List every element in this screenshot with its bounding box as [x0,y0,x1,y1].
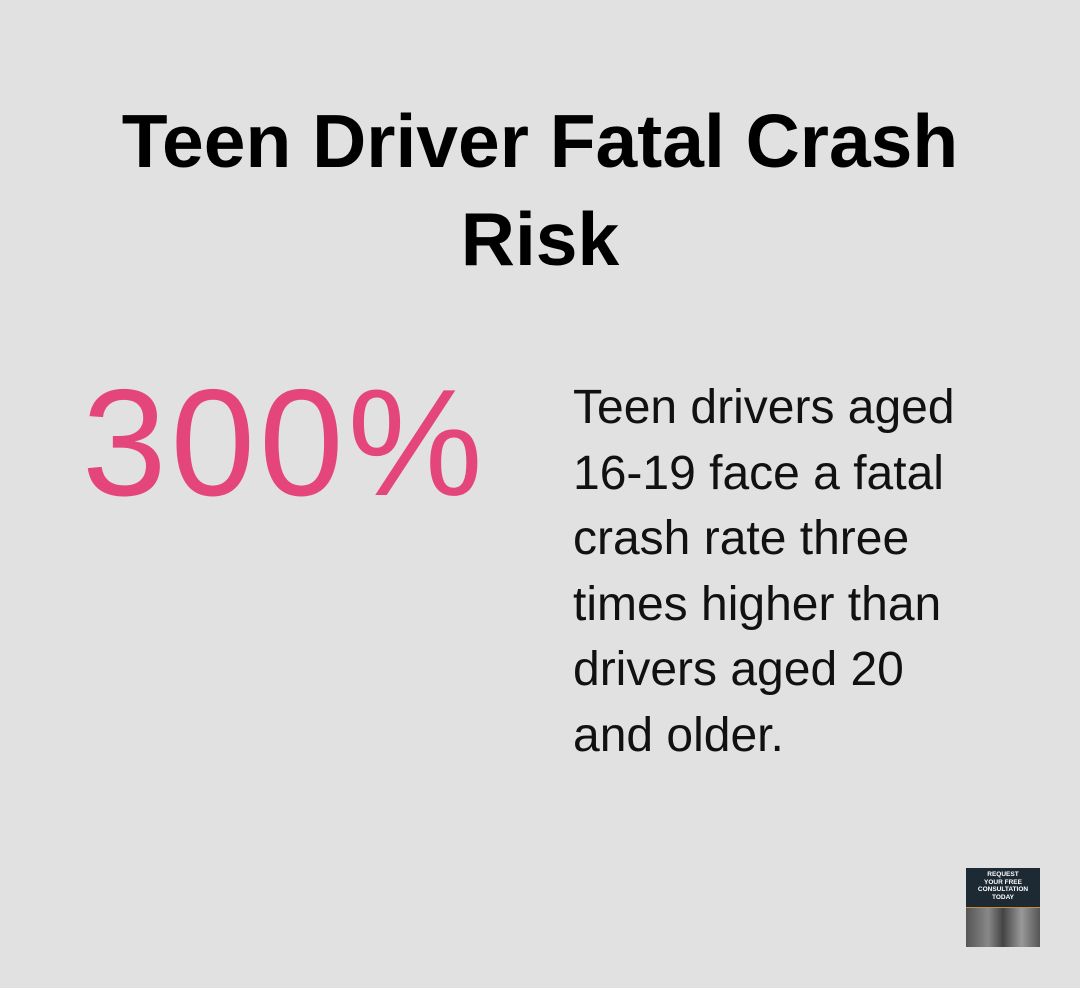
title: Risk [461,197,619,281]
title [122,99,958,281]
logo: consultation badge: REQUEST [987,871,1019,878]
logo: consultation badge: TODAY [992,894,1014,900]
big stat: 300% [82,358,487,528]
title: Teen Driver Fatal Crash [122,99,958,183]
description text: Teen drivers aged 16-19 face a fatal crash rate three times higher than drivers aged 20 and older. [573,381,955,762]
logo: consultation badge: YOUR FREE [984,878,1022,886]
logo: consultation badge [966,868,1040,947]
logo: consultation badge: CONSULTATION [978,886,1028,893]
